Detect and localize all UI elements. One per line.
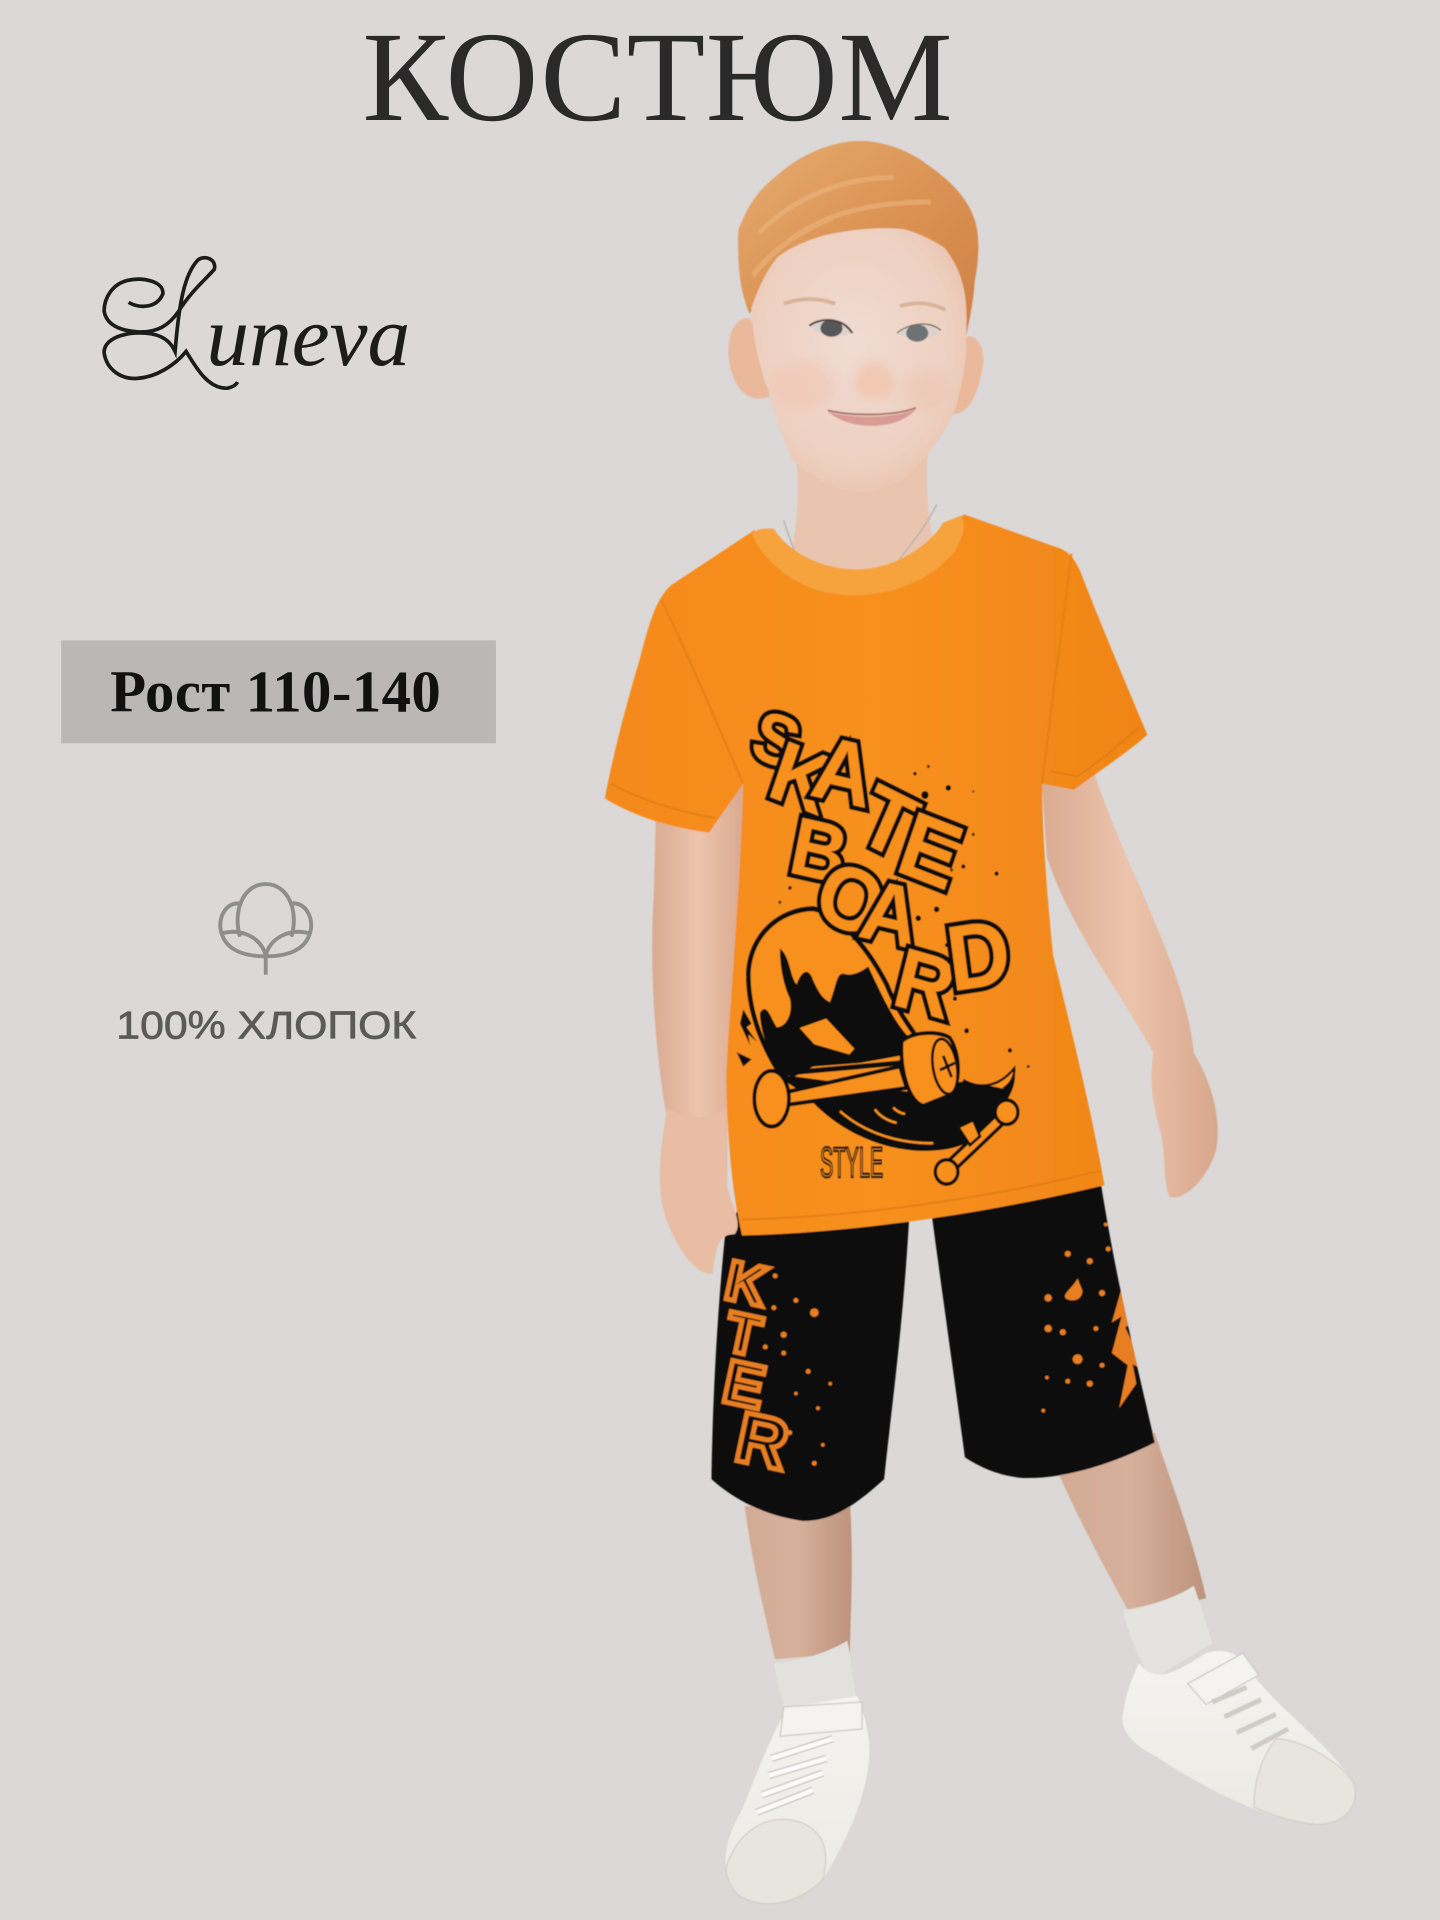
shorts print: skater lettering: E (717, 1347, 771, 1422)
splatter (737, 765, 1030, 1068)
shorts (711, 1176, 1155, 1521)
graffiti lettering: A (804, 717, 883, 828)
right leg (1057, 1433, 1206, 1619)
deck (748, 909, 920, 1074)
graffiti lettering: D (941, 900, 1016, 1012)
collar (752, 516, 964, 595)
brand logo: Luneva: Luneva (205, 289, 410, 384)
title: КОСТЮМ (362, 5, 953, 148)
graffiti lettering: B (783, 799, 855, 901)
right arm (1041, 759, 1218, 1197)
face and head (728, 141, 983, 492)
brand logo: Luneva (104, 258, 410, 388)
small truck (947, 1113, 1007, 1170)
left shoe (726, 1696, 869, 1904)
height badge (61, 640, 496, 743)
height badge: Рост 110-140 (110, 659, 441, 724)
t-shirt (605, 514, 1147, 1236)
right shoe (1122, 1651, 1355, 1824)
back of hair (738, 141, 978, 336)
graffiti lettering: K (759, 722, 844, 834)
necklace (784, 504, 937, 566)
trucks (773, 1067, 907, 1106)
wheels (754, 1071, 789, 1127)
sleeve seams (661, 553, 1071, 784)
graffiti lettering (744, 694, 1016, 1038)
mouth (828, 409, 916, 426)
cotton icon (220, 884, 311, 975)
graffiti lettering: R (885, 929, 964, 1038)
hair (738, 141, 978, 336)
shorts print: skater lettering: K (720, 1248, 773, 1318)
left upper arm (652, 784, 747, 1176)
material label: 100% ХЛОПОК (116, 1004, 417, 1047)
graffiti lettering: T (846, 766, 931, 879)
eyes (809, 320, 940, 342)
left ear (728, 318, 774, 399)
shorts print: skater lettering (720, 1257, 790, 1474)
hair strands (753, 178, 931, 276)
left leg (744, 1500, 852, 1659)
boy figure (605, 141, 1355, 1904)
neck (784, 447, 943, 588)
shorts print: left splatter (763, 1273, 832, 1466)
t-shirt print: skateboard graffiti: STYLE (820, 1138, 883, 1187)
cheeks (770, 361, 834, 410)
shorts print: right lightning and splatter (1040, 1222, 1138, 1414)
shorts print: skater lettering: T (720, 1300, 767, 1368)
right ear (945, 336, 983, 414)
left sock (774, 1641, 857, 1714)
left hand (660, 1108, 738, 1274)
graffiti lettering: O (803, 841, 898, 959)
right sock (1123, 1586, 1212, 1680)
t-shirt print: skateboard graffiti (737, 694, 1030, 1187)
graffiti lettering: A (853, 860, 928, 967)
shorts print: skater lettering: R (729, 1398, 796, 1486)
graffiti lettering: S (744, 694, 809, 785)
board belly (773, 1074, 1015, 1151)
face (751, 223, 968, 492)
eyebrows (784, 299, 945, 310)
graffiti lettering: E (887, 792, 974, 911)
nose (855, 362, 894, 398)
flames (760, 949, 913, 1077)
